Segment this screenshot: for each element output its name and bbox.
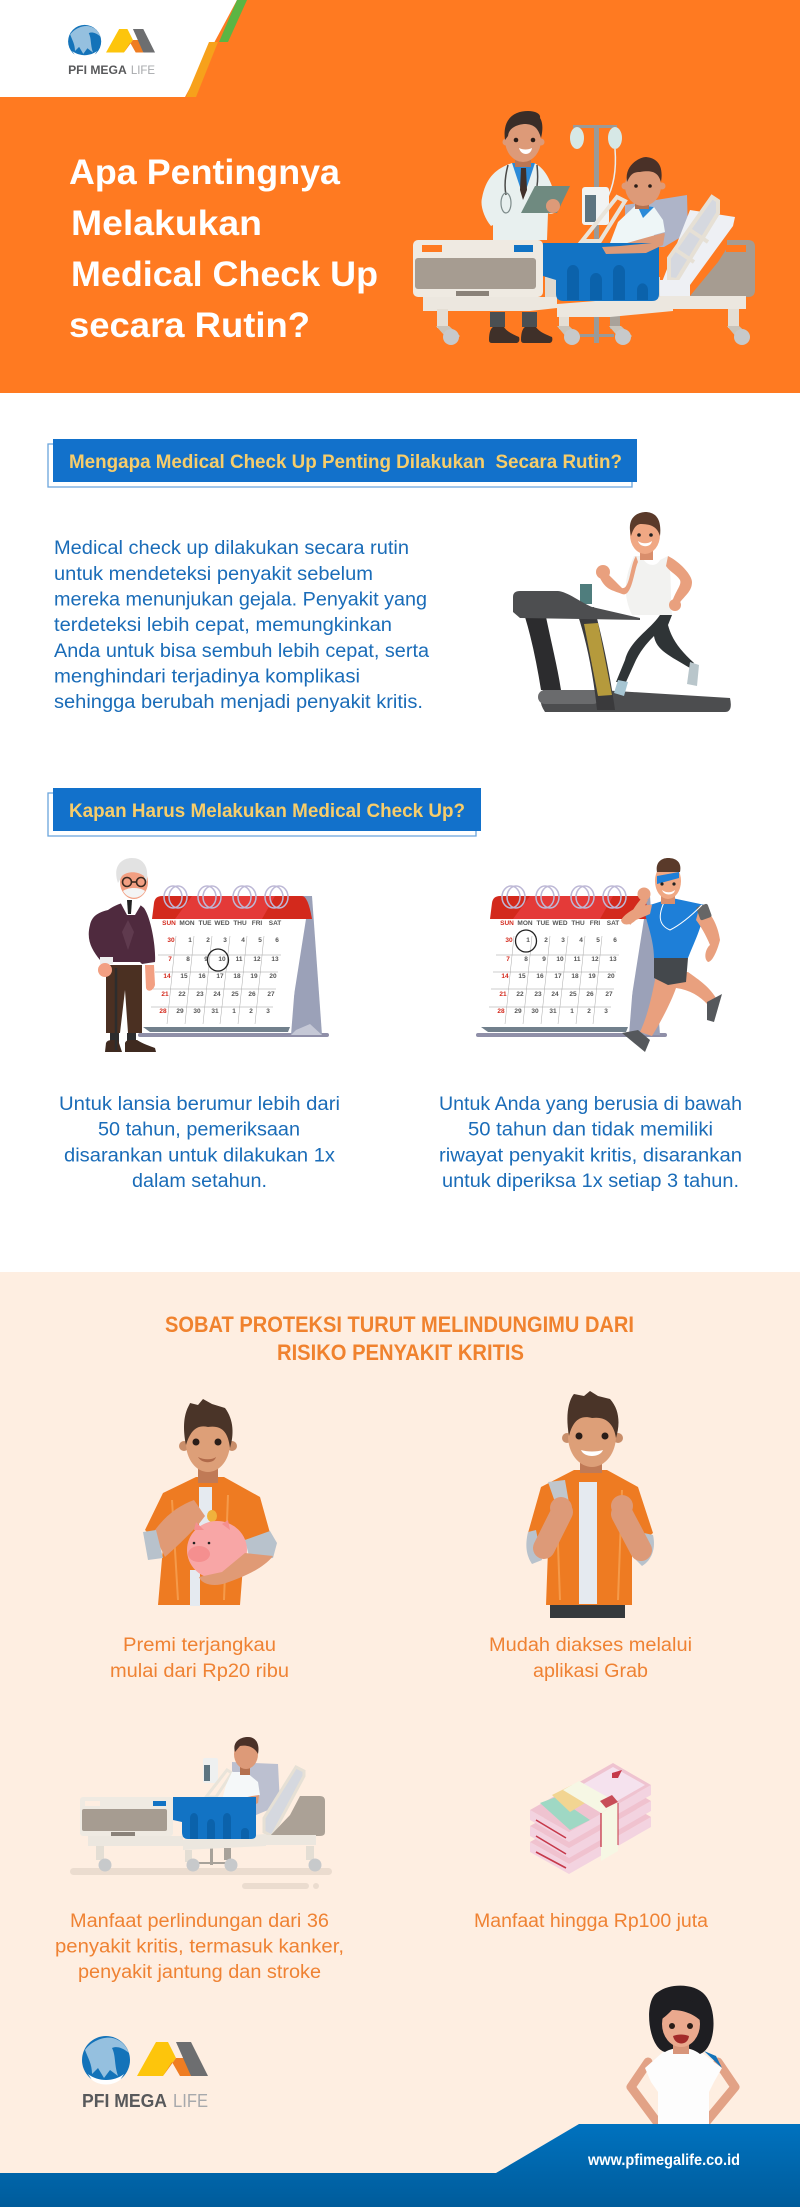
illustration: calendar and elderly man: 7	[168, 956, 172, 963]
illustration: calendar and young runner: 4	[579, 937, 583, 944]
illustration: calendar and elderly man: SUN	[162, 920, 176, 927]
text block: under 50 recommendation: Untuk Anda yang berusia di bawah	[439, 1094, 742, 1115]
illustration: calendar and elderly man: 6	[275, 937, 279, 944]
illustration: calendar and elderly man: 14	[163, 973, 171, 980]
heading banner: why	[48, 439, 637, 487]
illustration: man running on treadmill	[513, 512, 731, 712]
illustration: calendar and elderly man: 4	[241, 937, 245, 944]
illustration: calendar and young runner: MON	[517, 920, 533, 927]
illustration: calendar and young runner: 26	[586, 991, 594, 998]
illustration: calendar and young runner: 10	[556, 956, 564, 963]
illustration: calendar and young runner: 12	[591, 956, 599, 963]
illustration: calendar and elderly man: 28	[159, 1008, 167, 1015]
text: critical illness protection	[55, 1911, 344, 1983]
text block: why explanation: terdeteksi lebih cepat, memungkinkan	[54, 615, 392, 636]
illustration: calendar and elderly man: 30	[193, 1008, 201, 1015]
text block: under 50 recommendation: 50 tahun dan tidak memiliki	[468, 1120, 713, 1141]
illustration: calendar and young runner: 27	[605, 991, 613, 998]
illustration: calendar and young runner: 14	[501, 973, 509, 980]
illustration: calendar and young runner: 16	[536, 973, 544, 980]
illustration: calendar and young runner: 1	[570, 1008, 574, 1015]
logo: PFI Mega Life footer: PFI MEGA	[82, 2091, 167, 2111]
illustration: calendar and elderly man: 10	[218, 956, 226, 963]
text block: why explanation: sehingga berubah menjadi penyakit kritis.	[54, 692, 423, 713]
illustration: calendar and elderly man: 2	[249, 1008, 253, 1015]
heading banner: why: Mengapa Medical Check Up Penting Dilakukan Secara Rutin?	[69, 451, 622, 473]
illustration: calendar and elderly man	[89, 858, 329, 1052]
illustration: calendar and elderly man: 18	[233, 973, 241, 980]
text: critical illness protection: Manfaat perlindungan dari 36	[70, 1911, 329, 1932]
text block: why explanation: menghindari terjadinya komplikasi	[54, 666, 360, 688]
text: affordable premium: Premi terjangkau	[123, 1635, 276, 1656]
illustration: calendar and young runner: 30	[531, 1008, 539, 1015]
illustration: man holding smartphone	[526, 1391, 654, 1618]
logo: PFI Mega Life header: LIFE	[131, 63, 155, 77]
text: benefit up to Rp100 juta: Manfaat hingga Rp100 juta	[474, 1911, 708, 1932]
illustration: calendar and young runner: 20	[607, 973, 615, 980]
text block: why explanation: mereka menunjukan gejala. Penyakit yang	[54, 590, 427, 610]
illustration: calendar and young runner: SUN	[500, 920, 514, 927]
illustration: calendar and elderly man: 8	[186, 956, 190, 963]
illustration: calendar and young runner: 2	[587, 1008, 591, 1015]
title: secara Rutin?	[69, 306, 310, 345]
heading: sobat proteksi: SOBAT PROTEKSI TURUT MELINDUNGIMU DARI	[165, 1312, 634, 1337]
illustration: calendar and young runner: 3	[604, 1008, 608, 1015]
illustration: calendar and young runner: 9	[542, 956, 546, 963]
illustration: calendar and elderly man: 15	[180, 973, 188, 980]
illustration: calendar and elderly man: FRI	[252, 920, 262, 927]
illustration: calendar and elderly man: 24	[213, 991, 221, 998]
illustration: calendar and young runner: 13	[609, 956, 617, 963]
illustration: calendar and young runner: 17	[554, 973, 562, 980]
text: easy access via Grab: aplikasi Grab	[533, 1661, 648, 1682]
illustration: calendar and young runner: 1	[526, 937, 530, 944]
website url: www.pfimegalife.co.id	[587, 2152, 740, 2169]
illustration: patient on hospital bed	[70, 1737, 332, 1889]
illustration: calendar and young runner: THU	[571, 920, 585, 927]
illustration: calendar and elderly man: 17	[216, 973, 224, 980]
illustration: calendar and young runner: 18	[571, 973, 579, 980]
illustration: calendar and young runner: FRI	[590, 920, 600, 927]
illustration: calendar and young runner: 30	[505, 937, 513, 944]
text block: why explanation	[54, 538, 429, 713]
illustration: calendar and elderly man: 31	[211, 1008, 219, 1015]
illustration: calendar and young runner: 7	[506, 956, 510, 963]
illustration: calendar and elderly man: 20	[269, 973, 277, 980]
text block: under 50 recommendation: riwayat penyakit kritis, disarankan	[439, 1145, 742, 1166]
illustration: calendar and young runner: 22	[516, 991, 524, 998]
illustration: calendar and young runner: WED	[552, 920, 568, 927]
illustration: calendar and young runner: 3	[561, 937, 565, 944]
text block: elderly recommendation: Untuk lansia berumur lebih dari	[59, 1094, 340, 1115]
text: affordable premium: mulai dari Rp20 ribu	[110, 1661, 289, 1682]
illustration: calendar and elderly man: 11	[236, 956, 243, 963]
illustration: calendar and young runner: 29	[514, 1008, 522, 1015]
panel: why medical check up	[48, 439, 731, 713]
text: critical illness protection: penyakit jantung dan stroke	[78, 1962, 321, 1983]
illustration: calendar and elderly man: 3	[266, 1008, 270, 1015]
illustration: calendar and elderly man: 27	[267, 991, 275, 998]
illustration: doctor and patient on hospital bed	[413, 111, 755, 345]
illustration: calendar and elderly man: 13	[271, 956, 279, 963]
text: easy access via Grab: Mudah diakses melalui	[489, 1635, 692, 1656]
heading banner: when: Kapan Harus Melakukan Medical Check Up?	[69, 800, 465, 822]
panel: hero header	[0, 0, 800, 393]
illustration: calendar and elderly man: SAT	[269, 920, 281, 927]
title: Apa Pentingnya	[69, 153, 341, 192]
text block: elderly recommendation: dalam setahun.	[132, 1171, 267, 1192]
text: critical illness protection: penyakit kritis, termasuk kanker,	[55, 1936, 344, 1958]
illustration: calendar and elderly man: 5	[258, 937, 262, 944]
illustration: calendar and young runner: 8	[524, 956, 528, 963]
text block: elderly recommendation: 50 tahun, pemeriksaan	[98, 1120, 300, 1141]
text: easy access via Grab	[489, 1635, 692, 1682]
heading banner: when	[48, 788, 481, 836]
illustration: calendar and elderly man: MON	[179, 920, 195, 927]
illustration: calendar and young runner: 21	[499, 991, 507, 998]
illustration: calendar and elderly man: 25	[231, 991, 239, 998]
logo: PFI Mega Life footer	[82, 2036, 208, 2111]
illustration: smiling woman	[631, 1986, 735, 2124]
illustration: calendar and elderly man: TUE	[198, 920, 212, 927]
illustration: calendar and young runner: 15	[518, 973, 526, 980]
title	[69, 153, 378, 345]
illustration: calendar and young runner: TUE	[536, 920, 550, 927]
text block: elderly recommendation	[59, 1094, 340, 1192]
illustration: calendar and elderly man: 21	[161, 991, 169, 998]
illustration: calendar and elderly man: 30	[167, 937, 175, 944]
illustration: man with piggy bank	[143, 1399, 277, 1606]
text block: under 50 recommendation: untuk diperiksa 1x setiap 3 tahun.	[442, 1171, 739, 1192]
illustration: calendar and elderly man: 12	[253, 956, 261, 963]
illustration: calendar and elderly man: 16	[198, 973, 206, 980]
illustration: calendar and young runner: 6	[613, 937, 617, 944]
illustration: calendar and young runner: 28	[497, 1008, 505, 1015]
illustration: calendar and elderly man: 9	[204, 956, 208, 963]
text block: why explanation: Medical check up dilakukan secara rutin	[54, 538, 409, 559]
illustration: calendar and young runner: 19	[588, 973, 596, 980]
illustration: calendar and young runner: 25	[569, 991, 577, 998]
illustration: calendar and young runner: SAT	[607, 920, 619, 927]
illustration: calendar and young runner: 31	[549, 1008, 557, 1015]
illustration: calendar and young runner: 2	[544, 937, 548, 944]
illustration: calendar and young runner: 11	[574, 956, 581, 963]
illustration: calendar and young runner: 23	[534, 991, 542, 998]
logo: PFI Mega Life header	[68, 25, 155, 77]
illustration: calendar and young runner: 24	[551, 991, 559, 998]
logo: PFI Mega Life footer: LIFE	[173, 2091, 208, 2111]
illustration: calendar and elderly man: 19	[250, 973, 258, 980]
illustration: calendar and elderly man: 1	[188, 937, 192, 944]
illustration: calendar and elderly man: 23	[196, 991, 204, 998]
text block: why explanation: untuk mendeteksi penyakit sebelum	[54, 564, 373, 585]
illustration: calendar and elderly man: 22	[178, 991, 186, 998]
heading: sobat proteksi: RISIKO PENYAKIT KRITIS	[277, 1340, 524, 1365]
logo: PFI Mega Life header: PFI MEGA	[68, 63, 127, 77]
footer band	[0, 2124, 800, 2207]
illustration: calendar and elderly man: THU	[233, 920, 247, 927]
illustration: stacks of rupiah banknotes	[530, 1763, 651, 1874]
title: Medical Check Up	[71, 255, 378, 294]
illustration: calendar and elderly man: 2	[206, 937, 210, 944]
text block: under 50 recommendation	[439, 1094, 742, 1192]
text block: elderly recommendation: disarankan untuk dilakukan 1x	[64, 1145, 336, 1166]
text block: why explanation: Anda untuk bisa sembuh lebih cepat, serta	[54, 641, 429, 662]
illustration: calendar and young runner	[476, 858, 722, 1052]
panel: when to check up	[48, 788, 742, 1192]
illustration: calendar and elderly man: 1	[232, 1008, 236, 1015]
illustration: calendar and young runner: 5	[596, 937, 600, 944]
heading: sobat proteksi	[165, 1312, 634, 1365]
illustration: calendar and elderly man: 29	[176, 1008, 184, 1015]
title: Melakukan	[71, 204, 262, 243]
illustration: calendar and elderly man: 3	[223, 937, 227, 944]
illustration: calendar and elderly man: 26	[248, 991, 256, 998]
panel: sobat proteksi benefits	[0, 1272, 800, 2207]
text: affordable premium	[110, 1635, 289, 1682]
illustration: calendar and elderly man: WED	[214, 920, 230, 927]
